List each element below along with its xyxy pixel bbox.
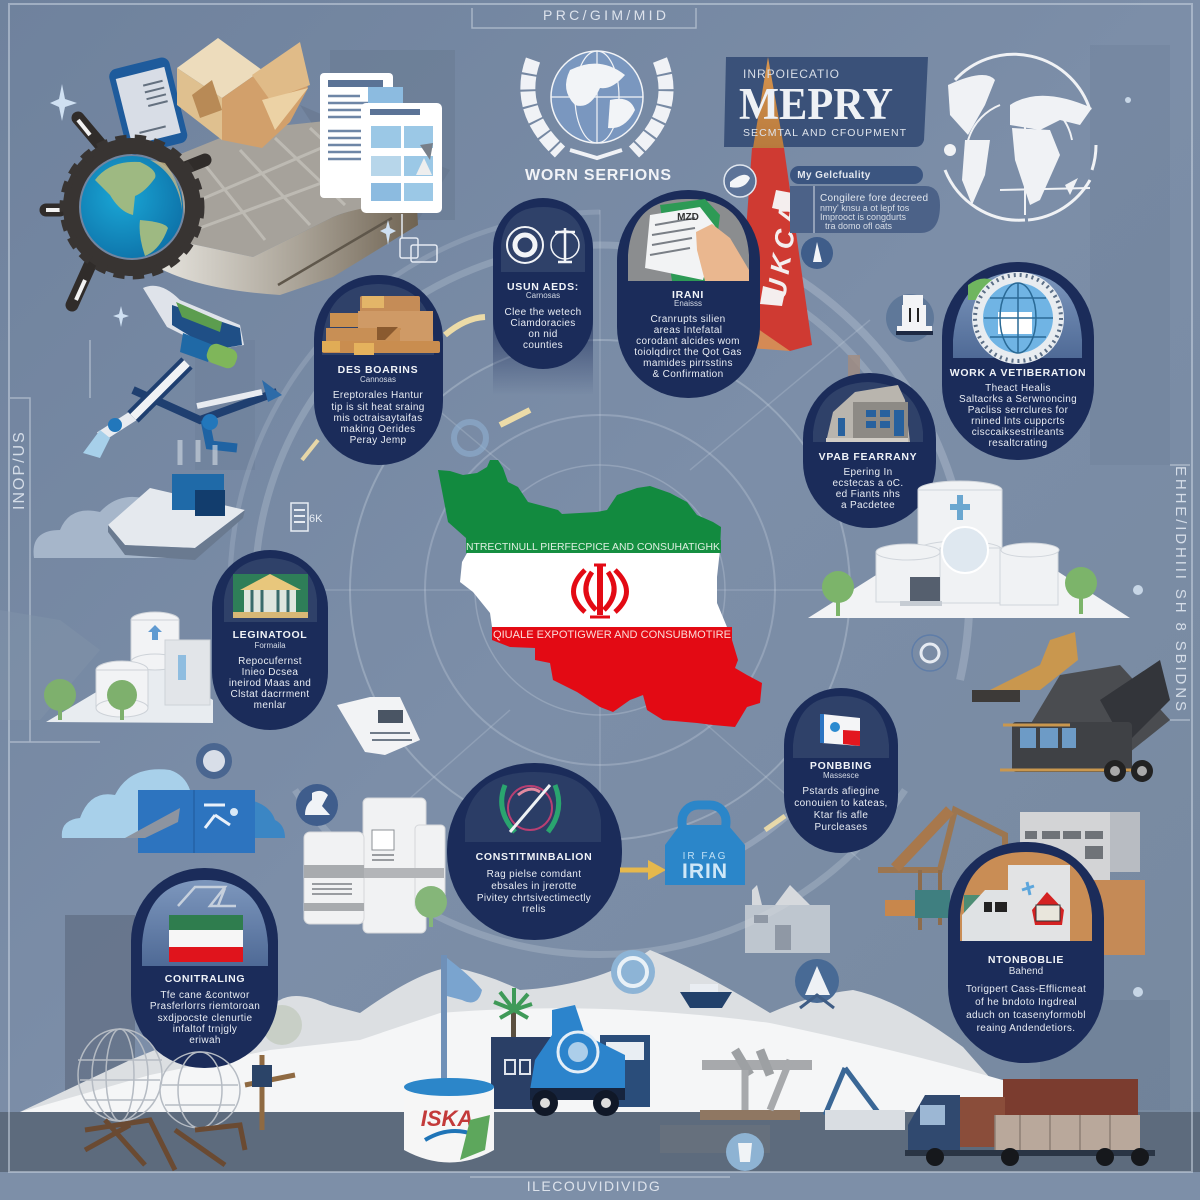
panel: CONITRALING: sxdjpocste clenurtie (158, 1013, 252, 1024)
panel: LEGINATOOL: menlar (254, 700, 287, 711)
panel: VPAB FEARRANY: Epering In (843, 467, 893, 478)
panel: USUN AEDS (493, 198, 593, 395)
title text (739, 67, 907, 139)
panel: WORK A VETIBERATION: Pacliss serrclures for (968, 405, 1069, 416)
panel: CONITRALING (131, 868, 278, 1068)
icon: small doc 5K: 6K (309, 513, 323, 525)
panel: IRAN document: toiolqdirct the Qot Gas (634, 347, 742, 358)
panel: LEGINATOOL (212, 550, 328, 730)
panel: WORK A VETIBERATION: Theact Healis (985, 383, 1051, 394)
panel: PONBBING: PONBBING (810, 760, 872, 772)
top heading label: PRC/GIM/MID (543, 7, 667, 23)
panel: WORK A VETIBERATION: WORK A VETIBERATION (950, 367, 1086, 379)
panel: PONBBING: Pstards afiegine (802, 786, 880, 797)
callout: quality note (790, 166, 940, 233)
illustration: machinery (660, 1050, 905, 1153)
panel: IRAN document: & Confirmation (652, 369, 724, 380)
icon: delivery truck (962, 865, 1070, 941)
sparkles (50, 84, 396, 327)
panel: NTONBOBLIE (948, 842, 1104, 1063)
red banner (741, 57, 812, 351)
icon: timber stack (322, 296, 440, 355)
panel: CONITRALING: Tfe cane &contwor (160, 990, 250, 1001)
panel: CONSTITMINBALION: Rag pielse comdant (487, 869, 581, 880)
icon: documents (320, 73, 442, 213)
callout: quality note: tra domo ofl oats (825, 221, 893, 231)
icon: round badge swirl (912, 635, 948, 671)
icon: IRIN tag: IRIN (682, 860, 728, 883)
icon: IRIN tag: IR FAG (683, 851, 727, 862)
panel: NTONBOBLIE: Torigpert Cass-Efflicmeat (966, 984, 1086, 995)
icon: twin emblems (507, 227, 579, 263)
panel: DES BOARINS: mis octraisaytaifas (334, 413, 422, 424)
icon: round badge wave (724, 165, 756, 197)
center: Iran map flag (438, 460, 762, 727)
panel: IRAN document: areas Intefatal (654, 325, 722, 336)
panel: WORK A VETIBERATION: resaltcrating (988, 438, 1048, 449)
panel: IRAN document: MZD (677, 212, 699, 223)
panel: DES BOARINS: Ereptorales Hantur (333, 390, 423, 401)
panel: LEGINATOOL: Inieo Dcsea (242, 667, 298, 678)
panel: NTONBOBLIE: of he bndoto Ingdreal (975, 997, 1077, 1008)
panel: CONITRALING: CONITRALING (165, 973, 245, 985)
icon: bank (233, 574, 308, 618)
panel: PONBBING: Purcleases (815, 822, 867, 833)
title text: SECMTAL AND CFOUPMENT (743, 127, 907, 139)
illustration: snow mountains (20, 950, 1040, 1112)
icon: cardboard boxes (177, 38, 310, 148)
panel: LEGINATOOL: Formaila (254, 641, 286, 650)
icon: sparkles right (1125, 97, 1143, 997)
panel: WORK A VETIBERATION: cisccaiksestrileants (972, 427, 1064, 438)
panel: PONBBING (784, 688, 898, 853)
panel: CONSTITMINBALION: rrelis (522, 904, 546, 915)
panel: CONSTITMINBALION: Pivitey chrtsivectimectly (477, 893, 591, 904)
illustration: robot arm (83, 286, 282, 458)
panel: IRAN document: mamides pirrsstins (643, 358, 733, 369)
panel: VPAB FEARRANY: ecstecas a oC. (832, 478, 904, 489)
panel: VPAB FEARRANY: a Pacdetee (841, 500, 895, 511)
left side label: INOP/US (11, 430, 28, 510)
icon: IRIN tag (665, 805, 745, 885)
panel: PONBBING: Massesce (823, 771, 860, 780)
icon: printer machine (886, 294, 934, 342)
panel: NTONBOBLIE: NTONBOBLIE (988, 954, 1064, 966)
panel: CONSTITMINBALION: ebsales in jrerotte (491, 881, 577, 892)
icon: white world globe (944, 54, 1096, 220)
panel: DES BOARINS: Cannosas (360, 375, 396, 384)
center: Iran map flag: QIUALE EXPOTIGWER AND CONSUBMOTIRE (493, 629, 731, 641)
panel: DES BOARINS (314, 275, 443, 465)
title panel (724, 57, 928, 147)
panel: USUN AEDS: on nid (528, 329, 558, 340)
panel: IRAN document: corodant alcides wom (636, 336, 740, 347)
panel: CONSTITMINBALION: CONSTITMINBALION (476, 851, 592, 863)
illustration: blue vehicle and building (491, 1005, 650, 1116)
panel: LEGINATOOL: Clstat dacrrment (231, 689, 309, 700)
icon: round globe badge (611, 950, 655, 994)
panel: CONITRALING: Prasferlorrs riemtoroan (150, 1001, 260, 1012)
icon: round badge person (296, 784, 338, 826)
callout: quality note: Congilere fore decreed (820, 193, 928, 204)
panel: CONITRALING: infaltof trnjgly (173, 1024, 237, 1035)
panel: USUN AEDS: USUN AEDS: (507, 281, 579, 293)
panel: USUN AEDS: Carnosas (526, 291, 560, 300)
icon: small printer (337, 697, 420, 755)
illustration: storage stacks left (0, 610, 213, 723)
illustration: central servers (304, 798, 447, 933)
panel: USUN AEDS: Clee the wetech (505, 307, 581, 318)
panel: DES BOARINS: DES BOARINS (338, 364, 418, 376)
illustration: palm tree (494, 988, 532, 1042)
illustration: ship and cloud (34, 440, 245, 560)
illustration: drum with logo (404, 1078, 494, 1162)
illustration: flag pole (441, 955, 482, 1080)
illustration: drum with logo: ISKA (421, 1106, 473, 1131)
panel: IRAN document: Enaisss (674, 299, 702, 308)
callout: quality note: Improoct is congdurts (820, 212, 907, 222)
illustration: wooden structure and building (878, 810, 1145, 955)
panel: USUN AEDS: Ciamdoracies (510, 318, 576, 329)
illustration: crane truck (972, 632, 1170, 782)
red banner: UKCA (761, 203, 804, 301)
icon: swirl emblem (502, 785, 559, 832)
panel: USUN AEDS: counties (523, 340, 563, 351)
panel: VPAB FEARRANY: VPAB FEARRANY (819, 451, 917, 463)
title text: MEPRY (739, 79, 893, 129)
icon: phone (108, 56, 189, 156)
icon: small flag (820, 714, 860, 746)
illustration: keyboard platform (157, 105, 450, 295)
center: Iran map flag: NTRECTINULL PIERFECPICE AND CONSUHATIGHK (466, 541, 720, 553)
bottom label: ILECOUVIDIVIDG (527, 1178, 661, 1194)
icon: round badge top of panel (196, 743, 232, 779)
illustration: building outline (745, 885, 830, 953)
icon: round badge lower (726, 1133, 764, 1171)
panel: IRAN document (617, 190, 760, 398)
callout: quality note: My Gelcfuality (797, 170, 871, 181)
icon: building (826, 385, 910, 442)
panel: VPAB FEARRANY (803, 355, 936, 528)
illustration: wire chairs (78, 1029, 295, 1170)
icon: UN emblem: WORN SERFIONS (525, 167, 671, 184)
icon: round badge pin (801, 237, 833, 269)
icon: striped flag (169, 915, 243, 962)
panel: WORK A VETIBERATION: rnined lnts cuppcrts (971, 416, 1065, 427)
panel: CONITRALING: eriwah (189, 1035, 221, 1046)
icon: round pin badge (795, 959, 839, 1008)
panel: IRAN document: Cranrupts silien (650, 314, 726, 325)
right side label: EHHE/IDHIII SH 8 SBIDNS (1172, 466, 1189, 711)
panel: WORK A VETIBERATION (942, 262, 1094, 460)
panel: DES BOARINS: Peray Jemp (350, 435, 407, 446)
panel: NTONBOBLIE: aduch on tcasenyformobl (966, 1010, 1086, 1021)
illustration: cargo truck (905, 1079, 1155, 1166)
illustration: blue panel with cloud (62, 769, 285, 853)
title text: INRPOIECATIO (743, 67, 839, 81)
panel: DES BOARINS: tip is sit heat sraing (331, 402, 425, 413)
illustration: storage stacks right (808, 481, 1130, 618)
panel: LEGINATOOL: Repocufernst (238, 656, 302, 667)
panel: LEGINATOOL: LEGINATOOL (233, 629, 307, 641)
panel: NTONBOBLIE: reaing Andendetiors. (977, 1023, 1075, 1034)
icon: gear globe (46, 118, 205, 305)
panel: PONBBING: Ktar fis afle (814, 810, 868, 821)
icon: globe seal (972, 272, 1064, 364)
callout: quality note: nmy' knsu a ot lepf tos (820, 203, 910, 213)
panel: CONSTITMINBALION (447, 763, 622, 940)
icon: devices outline (400, 214, 437, 262)
panel: VPAB FEARRANY: ed Fiants nhs (836, 489, 900, 500)
icon: small doc 5K (291, 503, 323, 531)
icon: small ship (680, 984, 732, 1008)
icon: UN emblem (525, 51, 671, 184)
panel: DES BOARINS: making Oerides (341, 424, 415, 435)
panel: LEGINATOOL: ineirod Maas and (229, 678, 311, 689)
panel: WORK A VETIBERATION: Saltacrks a Serwnoncing (959, 394, 1077, 405)
panel: NTONBOBLIE: Bahend (1009, 966, 1043, 977)
icon: Iran emblem (574, 565, 626, 617)
panel: PONBBING: conouien to kateas, (794, 798, 888, 809)
panel: IRAN document: IRANI (672, 289, 704, 301)
arrow: to IRIN tag (620, 860, 666, 880)
